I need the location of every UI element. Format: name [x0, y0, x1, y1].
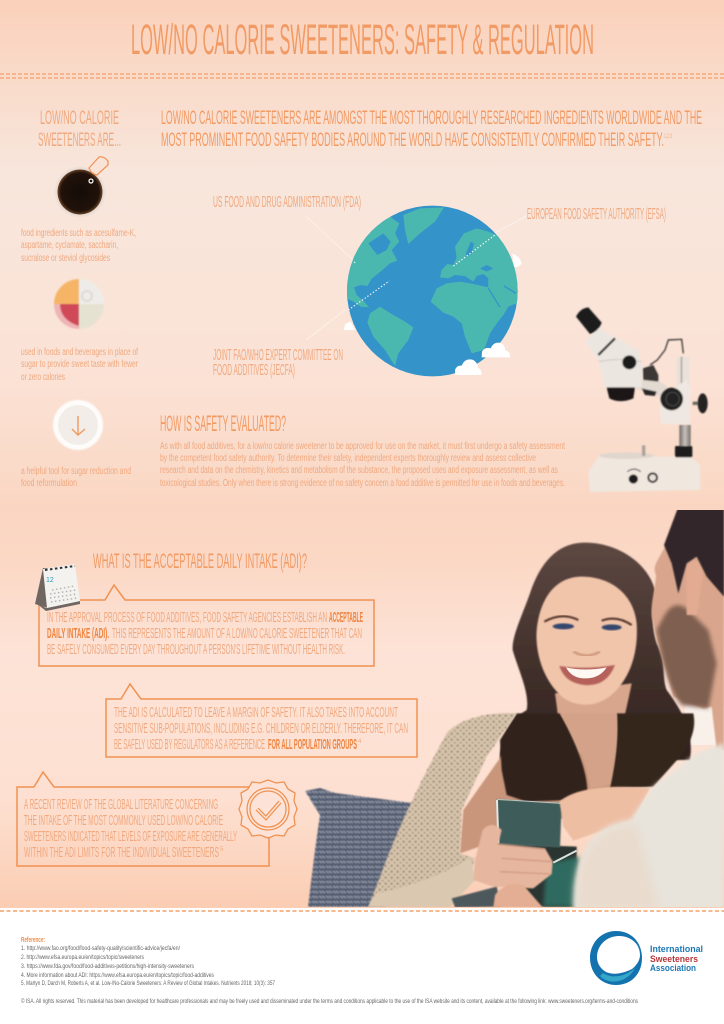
neck [555, 683, 632, 763]
intro statement [161, 108, 702, 151]
callout box 3: A RECENT REVIEW OF THE GLOBAL LITERATURE CONCERNING [24, 796, 218, 813]
text: safety evaluation body: by the competent food safety authority. To determine their safety, independent experts thoroughly review and assess collective [160, 453, 536, 464]
callout box 2 [106, 684, 417, 757]
callout box 1 [39, 585, 374, 666]
text: helpful tool: a helpful tool for sugar reduction and [21, 466, 131, 477]
references: 3. https://www.fda.gov/food/food-additives-petitions/high-intensity-sweeteners [21, 963, 195, 970]
woman's head and torso [500, 543, 691, 763]
hand holding mug [473, 825, 553, 888]
hair [664, 507, 724, 597]
text: HOW IS SAFETY EVALUATED? [160, 411, 286, 436]
callout box 2: BE SAFELY USED BY REGULATORS AS A REFERENCE [114, 736, 265, 753]
logo: International Sweeteners Association [590, 931, 703, 985]
nose [573, 652, 600, 655]
map: baltic sea [466, 242, 474, 257]
map: red sea [488, 288, 500, 307]
focus block [660, 380, 690, 424]
logo: International Sweeteners Association: Sweeteners [650, 954, 698, 964]
map: black sea [480, 265, 493, 272]
callout box 3: 5 [220, 847, 224, 853]
text: used in foods: or zero calories [21, 372, 65, 383]
references [21, 937, 275, 987]
dark lap shadow [490, 843, 577, 907]
map: north america [345, 217, 399, 307]
text: ACCEPTABLE [329, 609, 363, 626]
skin [651, 547, 724, 750]
man's head [651, 507, 724, 750]
base [588, 457, 701, 492]
map: europe and asia [440, 228, 520, 307]
text: used in foods [21, 347, 138, 383]
man's hand [493, 884, 543, 907]
text: helpful tool: food reformulation [21, 478, 77, 489]
neck and chest [560, 713, 617, 788]
map: south america [367, 307, 413, 366]
chest [460, 753, 617, 853]
icon: calendar: 12 [46, 577, 54, 584]
map: africa and arabia [431, 282, 517, 353]
globe [344, 206, 522, 376]
spoon [553, 851, 577, 863]
label: JECFA [213, 347, 343, 379]
beard [657, 605, 717, 708]
text: food ingredients: sucralose or steviol glycosides [21, 253, 110, 264]
icon: microscope [576, 307, 708, 492]
icon: foods and beverages plate [54, 279, 104, 329]
references: 2. http://www.efsa.europa.eu/en/topics/topic/sweeteners [21, 954, 145, 961]
brows [544, 616, 632, 625]
hair lock left [500, 713, 587, 802]
references: Reference: [21, 937, 45, 944]
callout box 2: FOR ALL POPULATION GROUPS [268, 736, 357, 753]
logo: International Sweeteners Association: International [650, 944, 703, 954]
text: food ingredients [21, 228, 136, 264]
hair lock right [610, 713, 694, 788]
map: hudson bay [368, 233, 391, 255]
label: JECFA: FOOD ADDITIVES (JECFA) [213, 362, 295, 379]
sweater cuff [368, 857, 475, 907]
ear [687, 561, 703, 615]
bracelet [465, 863, 474, 890]
callout box 3: WITHIN THE ADI LIMITS FOR THE INDIVIDUAL SWEETENERS [24, 844, 219, 861]
icon: coffee cup with sweetener packet [55, 157, 108, 217]
text: food ingredients: food ingredients such as acesulfame-K, [21, 228, 136, 239]
icon: down arrow in white bowl [53, 400, 103, 450]
references: 4. More information about ADI: https://www.efsa.europa.eu/en/topics/topic/food-additives [21, 972, 215, 979]
text: THIS REPRESENTS THE AMOUNT OF A LOW/NO CALORIE SWEETENER THAT CAN [112, 625, 362, 642]
text: US FOOD AND DRUG ADMINISTRATION (FDA) [213, 194, 361, 211]
torso [368, 713, 694, 907]
callout box 2: 4 [358, 739, 362, 745]
text: SWEETENERS INDICATED THAT LEVELS OF EXPOSURE ARE GENERALLY [24, 828, 237, 845]
logo: International Sweeteners Association: Association [650, 963, 696, 973]
text: safety evaluation body [160, 441, 565, 489]
icon: approval badge with check [239, 780, 297, 838]
text: used in foods: used in foods and beverages in place of [21, 347, 138, 358]
cable [650, 339, 683, 365]
window light behind [685, 705, 724, 745]
callout box 3 [17, 772, 269, 866]
left heading: low/no calorie sweeteners are [38, 108, 121, 151]
focus knob [660, 388, 683, 410]
map: persian gulf [504, 286, 516, 293]
objective [603, 378, 642, 387]
cushion [305, 788, 412, 907]
hand on mug [559, 787, 650, 841]
callout box 1: DAILY INTAKE (ADI). [47, 625, 109, 642]
intro statement: 1,2,3 [664, 134, 672, 140]
map: arabia bridge [488, 278, 505, 290]
mug [497, 799, 562, 847]
text: used in foods: sugar to provide sweet taste with fewer [21, 359, 138, 370]
text: JOINT FAO/WHO EXPERT COMMITTEE ON [213, 347, 343, 364]
text: SWEETENERS ARE... [38, 130, 121, 151]
icon: calendar [35, 564, 80, 611]
pointer lines to agencies [306, 214, 530, 340]
back hair [500, 543, 691, 760]
callout box 3: THE INTAKE OF THE MOST COMMONLY USED LOW/NO CALORIE [24, 812, 223, 829]
arm [635, 378, 667, 397]
text: food ingredients: aspartame, cyclamate, saccharin, [21, 240, 118, 251]
eyepiece [576, 307, 602, 334]
sweater [368, 713, 517, 907]
head [585, 328, 643, 379]
references: 1. http://www.fao.org/food/food-safety-quality/scientific-advice/jecfa/en/ [21, 945, 180, 952]
man's shirt [573, 743, 724, 910]
text: helpful tool [21, 466, 131, 489]
text: WHAT IS THE ACCEPTABLE DAILY INTAKE (ADI)? [93, 550, 307, 573]
pillar [679, 425, 691, 447]
text: IN THE APPROVAL PROCESS OF FOOD ADDITIVES, FOOD SAFETY AGENCIES ESTABLISH AN [47, 609, 327, 626]
references: 5. Martyn D, Darch M, Roberts A, et al. Low-/No-Calorie Sweeteners: A Review of Global Intakes. Nutrients 2018; 10(3): 357 [21, 980, 275, 987]
text: LOW/NO CALORIE [40, 108, 119, 129]
mouth [559, 665, 615, 685]
face shape [536, 577, 637, 705]
clouds [344, 253, 522, 375]
woman's face [536, 577, 637, 705]
phone [452, 887, 502, 907]
eyes [553, 623, 574, 629]
map: greenland [403, 207, 444, 244]
photo: couple with mug [305, 507, 724, 910]
